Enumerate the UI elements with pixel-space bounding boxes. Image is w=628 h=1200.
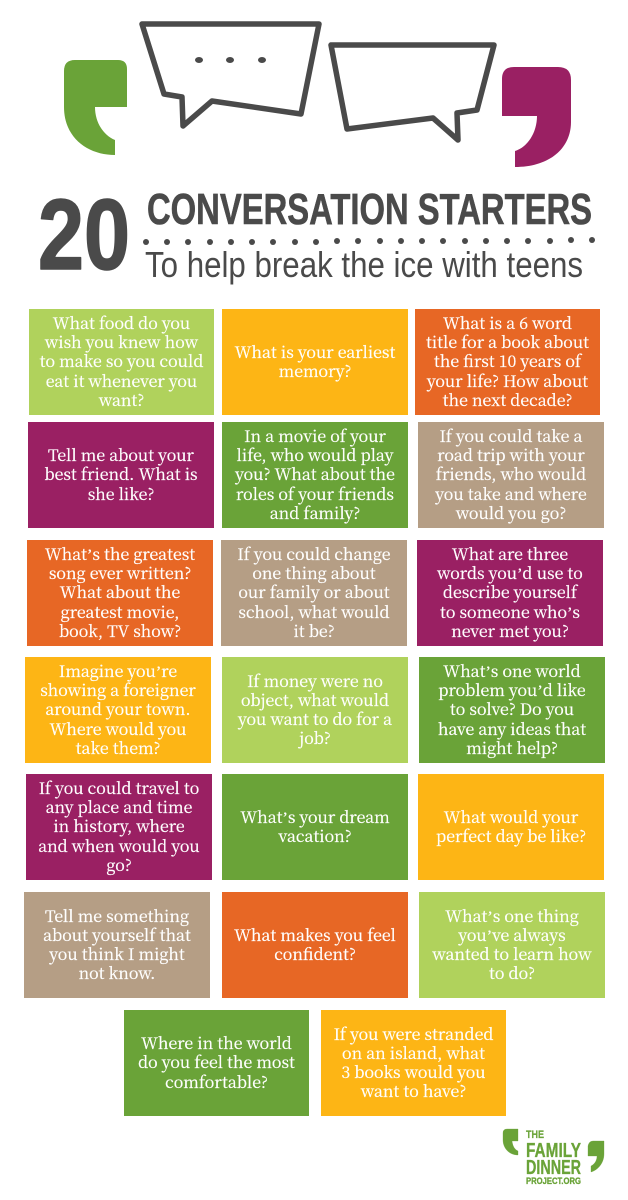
- card: confident: [222, 892, 408, 998]
- card: perfect day: [418, 774, 604, 880]
- card: greatest song: greatest movie,: [61, 600, 179, 623]
- card: confident: What makes you feel: [234, 923, 396, 946]
- card: stranded: If you were stranded: [334, 1022, 493, 1045]
- logo: The Family Dinner Project: FAMILY: [526, 1140, 582, 1162]
- card: road trip: If you could take a: [440, 424, 582, 447]
- card: movie: you? What about the: [235, 462, 395, 485]
- card: change one thing: our family or about: [238, 580, 390, 603]
- card: something about yourself: about yourself that: [43, 923, 191, 946]
- card: food: [29, 309, 214, 415]
- card: best friend: Tell me about your: [48, 443, 194, 466]
- card: three words: never met you?: [451, 619, 569, 642]
- card: foreigner: showing a foreigner: [40, 678, 196, 701]
- card: road trip: [418, 422, 604, 528]
- card: movie: life, who would play: [237, 443, 393, 466]
- dotted divider: [143, 237, 595, 245]
- card: comfortable: [124, 1010, 309, 1116]
- icon: green quote mark: [64, 60, 127, 155]
- card: time travel: go?: [106, 853, 132, 876]
- card: foreigner: [25, 657, 211, 763]
- card: world problem: problem you’d like: [438, 678, 586, 701]
- card: time travel: in history, where: [53, 814, 185, 837]
- card: food: What food do you: [53, 311, 190, 334]
- card: foreigner: Where would you: [49, 717, 187, 740]
- card: best friend: she like?: [88, 482, 154, 505]
- logo text: THE: [526, 1129, 544, 1141]
- card: change one thing: it be?: [293, 619, 335, 642]
- card: 6 word title: title for a book about: [426, 330, 589, 353]
- card: greatest song: [27, 540, 213, 646]
- card: 6 word title: [415, 309, 600, 415]
- card: learn how: to do?: [489, 961, 535, 984]
- card: learn how: you’ve always: [458, 923, 566, 946]
- card: food: to make so you could: [40, 349, 203, 372]
- card: something about yourself: [24, 892, 210, 998]
- card: food: eat it whenever you: [46, 369, 197, 392]
- card: change one thing: If you could change: [237, 542, 391, 565]
- card: world problem: What’s one world: [443, 659, 581, 682]
- card: three words: to someone who’s: [440, 600, 580, 623]
- card: earliest memory: What is your earliest: [235, 340, 395, 363]
- card: earliest memory: [222, 309, 408, 415]
- card: road trip: you take and where: [435, 482, 587, 505]
- card: something about yourself: not know.: [79, 961, 155, 984]
- card: earliest memory: memory?: [279, 359, 351, 382]
- card: time travel: any place and time: [46, 795, 192, 818]
- card: 6 word title: the first 10 years of: [434, 349, 581, 372]
- card: world problem: to solve? Do you: [450, 697, 574, 720]
- card: greatest song: What’s the greatest: [45, 542, 195, 565]
- card: stranded: on an island, what: [342, 1041, 485, 1064]
- icon: right speech bubble: [331, 45, 494, 140]
- card: confident: confident?: [274, 942, 356, 965]
- card: comfortable: Where in the world: [141, 1031, 292, 1054]
- logo left quote: [503, 1129, 518, 1155]
- logo: The Family Dinner Project: DINNER: [526, 1157, 581, 1179]
- card: road trip: friends, who would: [436, 462, 586, 485]
- card: foreigner: take them?: [76, 736, 160, 759]
- card: food: want?: [99, 388, 144, 411]
- card: perfect day: What would your: [444, 805, 578, 828]
- card: time travel: and when would you: [38, 834, 200, 857]
- card: movie: roles of your friends: [236, 482, 394, 505]
- card: three words: What are three: [452, 542, 568, 565]
- card: comfortable: do you feel the most: [138, 1050, 295, 1073]
- card: money: job?: [299, 726, 331, 749]
- card: foreigner: around your town.: [45, 697, 191, 720]
- card: 6 word title: the next decade?: [443, 388, 572, 411]
- card: greatest song: What about the: [60, 580, 180, 603]
- card: movie: and family?: [270, 501, 360, 524]
- card: dream vacation: vacation?: [278, 824, 352, 847]
- icon: purple quote mark: [502, 67, 571, 167]
- card: three words: words you’d use to: [437, 561, 583, 584]
- card: learn how: [419, 892, 605, 998]
- card: money: you want to do for a: [238, 707, 392, 730]
- card: 6 word title: your life? How about: [427, 369, 588, 392]
- card: stranded: 3 books would you: [341, 1060, 486, 1083]
- card: learn how: What’s one thing: [445, 904, 579, 927]
- card: comfortable: comfortable?: [165, 1070, 268, 1093]
- card: greatest song: book, TV show?: [59, 619, 181, 642]
- card: movie: [222, 422, 408, 528]
- card: change one thing: [221, 540, 407, 646]
- card: change one thing: school, what would: [238, 600, 390, 623]
- card: three words: describe yourself: [443, 580, 577, 603]
- title number: 20: [38, 179, 130, 291]
- card: perfect day: perfect day be like?: [436, 824, 586, 847]
- card: world problem: might help?: [466, 736, 558, 759]
- card: best friend: [28, 422, 214, 528]
- card: stranded: [321, 1010, 506, 1116]
- card: best friend: best friend. What is: [44, 462, 198, 485]
- card: foreigner: Imagine you’re: [59, 659, 177, 682]
- header graphic: [38, 21, 595, 291]
- card: food: wish you knew how: [45, 330, 198, 353]
- card: world problem: have any ideas that: [438, 717, 586, 740]
- card: something about yourself: Tell me something: [45, 904, 189, 927]
- card: money: [222, 657, 408, 763]
- card: money: If money were no: [247, 669, 383, 692]
- card: world problem: [419, 657, 605, 763]
- card: dream vacation: [222, 774, 408, 880]
- card: change one thing: one thing about: [252, 561, 376, 584]
- card: road trip: road trip with your: [437, 443, 585, 466]
- card: greatest song: song ever written?: [49, 561, 191, 584]
- card: time travel: If you could travel to: [39, 776, 199, 799]
- card: movie: In a movie of your: [244, 424, 386, 447]
- card: road trip: would you go?: [456, 501, 566, 524]
- card: time travel: [26, 774, 212, 880]
- card: dream vacation: What’s your dream: [240, 805, 390, 828]
- card: stranded: want to have?: [361, 1079, 466, 1102]
- icon: ellipsis dots: [195, 57, 266, 63]
- card: something about yourself: you think I might: [49, 942, 185, 965]
- card: three words: [417, 540, 603, 646]
- icon: left speech bubble: [142, 24, 319, 126]
- card: learn how: wanted to learn how: [432, 942, 592, 965]
- card: 6 word title: What is a 6 word: [443, 311, 572, 334]
- logo: The Family Dinner Project: PROJECT.ORG: [526, 1176, 581, 1187]
- card: money: object, what would: [241, 688, 389, 711]
- logo right quote: [588, 1141, 604, 1172]
